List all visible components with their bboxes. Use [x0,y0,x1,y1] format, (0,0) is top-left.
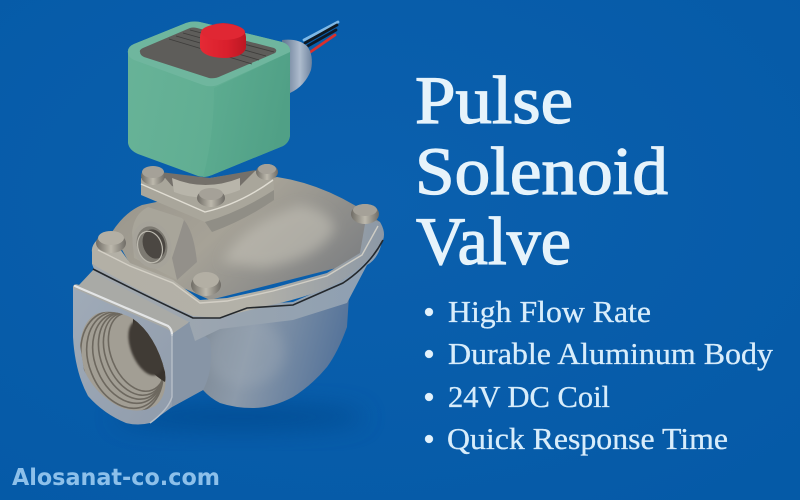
bullet: 24V DC coil: 24V DC Coil [448,379,610,414]
bullet: quick response time: Quick Response Time [447,421,728,456]
flange bolts [96,164,379,296]
coil mount stem [141,168,274,232]
gasket line [93,240,383,318]
flange top highlight [98,226,378,303]
lower clamp ring [92,236,383,341]
inlet port block [66,268,211,426]
title line 3: Valve [416,203,571,279]
feature list [425,294,774,456]
solenoid coil housing [128,22,290,177]
threaded side port [127,207,197,280]
watermark: Alosanat-co.com [12,465,220,491]
icon: pulse solenoid valve [66,22,384,426]
valve lower bowl [200,296,349,408]
valve shadow [115,404,365,430]
lead wires [304,22,338,53]
bullet: durable aluminum body: Durable Aluminum Body [448,336,774,371]
bullet: high flow rate: High Flow Rate [448,294,651,329]
coil top label plate [140,28,276,78]
wire connector [282,40,312,94]
title [415,62,668,279]
red cap [200,23,246,58]
upper dome [112,177,380,300]
upper flange ring [92,218,384,318]
threaded inlet opening [80,312,166,410]
title line 1: Pulse [415,62,573,138]
dome highlight [222,205,335,268]
title line 2: Solenoid [415,133,668,209]
